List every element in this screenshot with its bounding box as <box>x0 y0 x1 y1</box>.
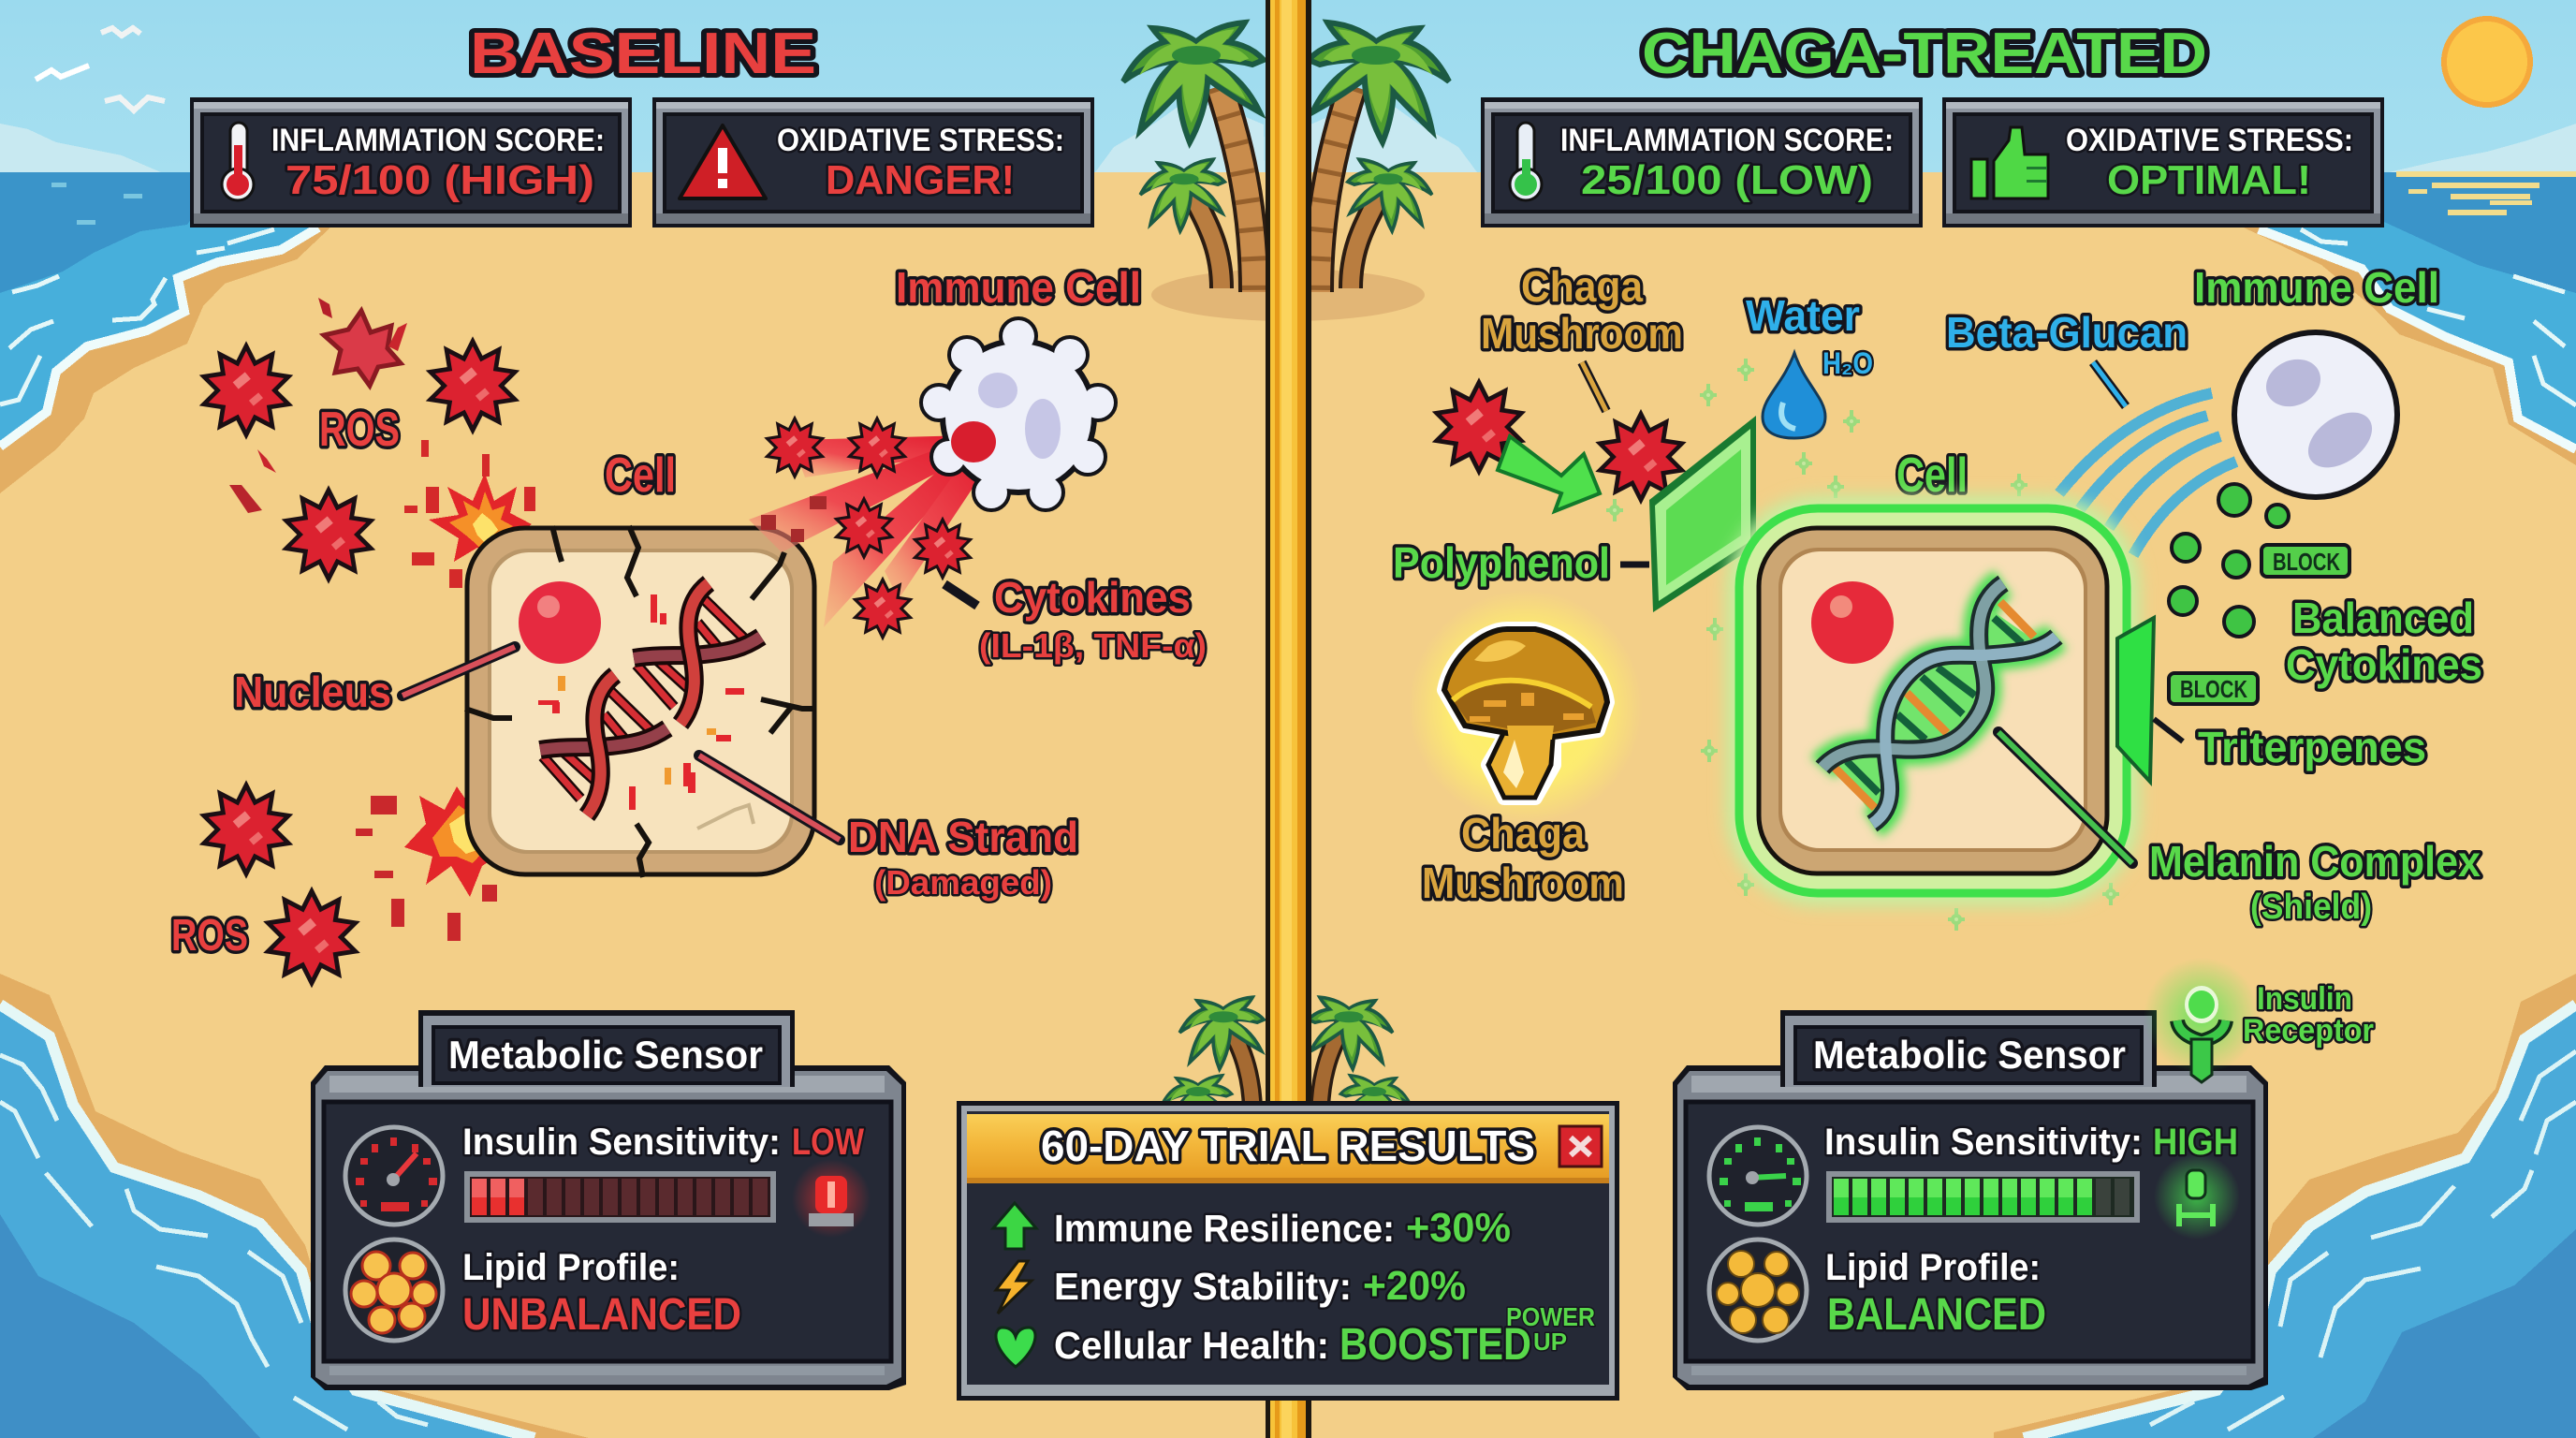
balanced value: BALANCED <box>1827 1290 2046 1340</box>
icon: water drop <box>1763 353 1825 438</box>
DNA healthy <box>1822 583 2056 824</box>
immune resilience label: Immune Resilience: <box>1054 1207 1395 1250</box>
chaga mushroom bottom label: Chaga <box>1461 809 1585 858</box>
shield sublabel: (Shield) <box>2250 888 2372 927</box>
polyphenol leader <box>1620 562 1649 567</box>
high value: HIGH <box>2153 1122 2238 1163</box>
nucleus label: Nucleus <box>234 668 391 716</box>
60-day trial results panel <box>957 1101 1619 1401</box>
insulin receptor icon <box>2144 958 2260 1082</box>
icon: lightning bolt <box>996 1261 1032 1313</box>
background: sky <box>0 0 2576 172</box>
ROS label top: ROS <box>319 403 400 457</box>
metabolic sensor treated <box>1673 1010 2268 1390</box>
chaga mushroom top label <box>1481 262 1683 358</box>
label: INFLAMMATION SCORE: <box>1560 123 1894 158</box>
nucleus <box>519 581 601 664</box>
power up tag: UP <box>1533 1328 1567 1356</box>
title: chaga-treated: CHAGA-TREATED <box>1642 22 2207 86</box>
icon: red thermometer <box>222 123 254 200</box>
panel: inflammation score treated <box>1481 97 1923 227</box>
bottom-right shoreline <box>1994 974 2576 1438</box>
insulin label: Insulin Sensitivity: <box>462 1122 781 1163</box>
insulin receptor label: Receptor <box>2243 1013 2374 1049</box>
shadow under palms <box>1151 269 1425 321</box>
leader: cytokines <box>944 584 977 606</box>
label: INFLAMMATION SCORE: <box>271 123 605 158</box>
green arrow neutralizing ROS <box>1498 436 1600 511</box>
dna sublabel: (Damaged) <box>874 863 1052 902</box>
beta-glucan waves <box>2059 393 2236 555</box>
value: OPTIMAL! <box>2107 157 2311 203</box>
ROS treated pair <box>1437 382 1682 500</box>
icon: warning triangle <box>680 125 766 198</box>
dna label: DNA Strand <box>848 813 1078 861</box>
title: baseline: BASELINE <box>470 22 816 86</box>
triterpenes label: Triterpenes <box>2198 723 2426 771</box>
chaga mushroom <box>1409 590 1643 824</box>
value: 75/100 (HIGH) <box>285 157 594 203</box>
immune resilience value: +30% <box>1406 1205 1511 1251</box>
explosion bottom <box>356 786 497 941</box>
metabolic sensor baseline <box>311 1010 906 1390</box>
cytokines label: Cytokines <box>2286 640 2482 689</box>
immune cell label treated: Immune Cell <box>2194 263 2439 312</box>
icon: thumbs up <box>1971 127 2048 198</box>
water label: Water <box>1746 291 1860 340</box>
close button <box>1559 1126 1602 1167</box>
insulin bar low <box>464 1171 776 1223</box>
insulin bar high <box>1826 1171 2140 1223</box>
cell treated <box>1759 528 2107 873</box>
cytokines <box>767 418 971 638</box>
leader: chaga <box>1582 362 1606 411</box>
palm trees top right <box>1309 22 1449 292</box>
center divider <box>1266 0 1311 1438</box>
polyphenol shield <box>1649 416 1756 612</box>
boosted value: BOOSTED <box>1339 1320 1531 1370</box>
leader: nucleus <box>402 647 515 696</box>
cell baseline <box>465 526 816 877</box>
birds <box>36 28 165 110</box>
icon: receptor glowing <box>2154 1153 2240 1240</box>
value: 25/100 (LOW) <box>1581 157 1873 203</box>
lipid label: Lipid Profile: <box>462 1247 680 1288</box>
leader: dna <box>699 756 840 840</box>
top-right shoreline <box>2244 171 2576 465</box>
cracks <box>465 526 816 877</box>
lipid label: Lipid Profile: <box>1825 1247 2041 1288</box>
nucleus treated <box>1811 581 1894 664</box>
polyphenol label: Polyphenol <box>1393 538 1610 587</box>
low value: LOW <box>792 1122 864 1163</box>
palm trees top left <box>1123 22 1264 292</box>
palm trees bottom right <box>1309 997 1411 1135</box>
cellular health label: Cellular Health: <box>1054 1324 1329 1367</box>
ROS bottom <box>268 891 356 983</box>
cytokines sublabel: (IL-1β, TNF-α) <box>979 626 1207 665</box>
palm trees bottom left <box>1162 997 1264 1135</box>
sensor title: Metabolic Sensor <box>448 1033 763 1077</box>
DNA damaged <box>540 583 761 815</box>
chaga mushroom top label: Chaga <box>1521 262 1643 311</box>
immune cell label baseline: Immune Cell <box>896 263 1141 312</box>
label: OXIDATIVE STRESS: <box>2066 123 2353 158</box>
cytokine rays <box>749 435 992 627</box>
value: DANGER! <box>826 157 1015 203</box>
beta-glucan leader <box>2093 362 2126 406</box>
icon: red gauge <box>345 1127 443 1225</box>
icon: lipid droplets <box>345 1240 443 1341</box>
sun <box>2441 16 2533 108</box>
immune cell baseline <box>923 320 1114 508</box>
icon: green up arrow <box>993 1203 1036 1249</box>
sparkles <box>1606 359 2119 931</box>
melanin shield glow <box>1734 503 2132 899</box>
bottom-left shoreline <box>0 974 589 1438</box>
panel: oxidative stress baseline <box>652 97 1094 227</box>
unbalanced value: UNBALANCED <box>462 1290 741 1340</box>
chaga mushroom top label: Mushroom <box>1481 309 1683 358</box>
balanced label: Balanced <box>2292 594 2474 642</box>
panel: inflammation score baseline <box>190 97 632 227</box>
power up tag: POWER <box>1506 1302 1595 1331</box>
explosion top <box>404 440 535 588</box>
leader: melanin <box>1998 732 2132 863</box>
header title: 60-DAY TRIAL RESULTS <box>1041 1122 1535 1170</box>
cytokines label: Cytokines <box>994 573 1191 622</box>
clouds <box>0 105 2576 172</box>
icon: green gauge <box>1709 1127 1807 1225</box>
icon: alarm <box>792 1159 871 1238</box>
chaga mushroom bottom label: Mushroom <box>1422 858 1624 907</box>
icon: green thermometer <box>1510 123 1542 200</box>
sensor title: Metabolic Sensor <box>1813 1033 2126 1077</box>
cell label baseline: Cell <box>605 448 676 503</box>
H2O label: H₂O <box>1822 346 1873 380</box>
leader: triterpenes <box>2154 719 2183 741</box>
insulin receptor label <box>2243 981 2374 1049</box>
top-left shoreline <box>0 172 374 493</box>
beta-glucan label: Beta-Glucan <box>1946 308 2188 357</box>
ROS label bottom: ROS <box>171 911 248 961</box>
block badge top: BLOCK <box>2273 548 2340 576</box>
triterpenes shield <box>2117 618 2154 782</box>
panel: oxidative stress treated <box>1942 97 2384 227</box>
header bar <box>967 1114 1609 1183</box>
insulin label: Insulin Sensitivity: <box>1824 1122 2143 1163</box>
insulin receptor label: Insulin <box>2257 981 2352 1017</box>
ROS cluster top left <box>204 298 515 579</box>
immune cell treated <box>2234 332 2397 497</box>
block badge lower: BLOCK <box>2180 675 2247 703</box>
icon: lipid droplets balanced <box>1709 1240 1807 1341</box>
melanin label: Melanin Complex <box>2149 837 2481 886</box>
power up tag <box>1506 1302 1595 1356</box>
chaga mushroom bottom label <box>1422 809 1624 907</box>
energy stability value: +20% <box>1363 1263 1466 1309</box>
energy stability label: Energy Stability: <box>1054 1265 1352 1308</box>
label: OXIDATIVE STRESS: <box>777 123 1064 158</box>
icon: green heart <box>996 1328 1035 1367</box>
cell label treated: Cell <box>1896 448 1968 503</box>
ROS lower left <box>204 785 288 874</box>
balanced cytokines dots <box>2169 484 2289 637</box>
